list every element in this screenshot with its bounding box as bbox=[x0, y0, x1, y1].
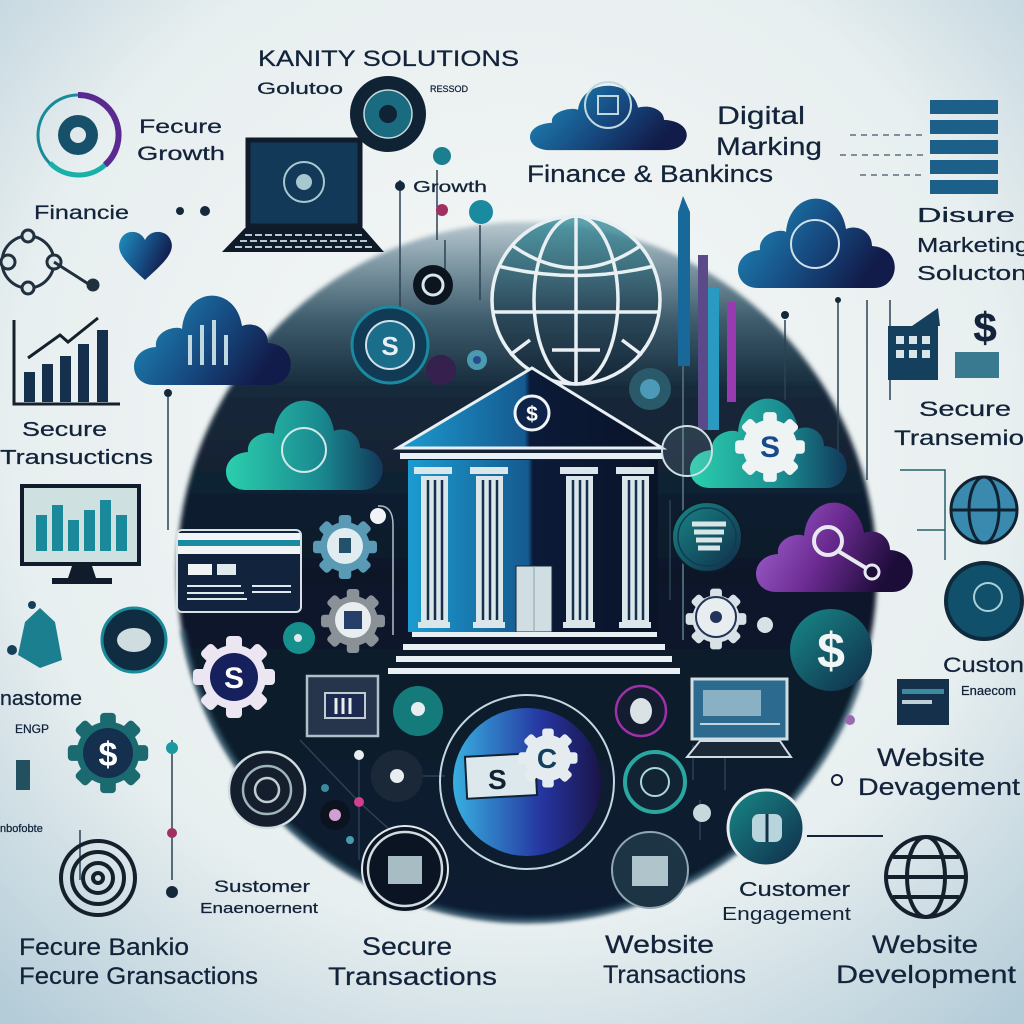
icon: search circle right bbox=[946, 563, 1022, 639]
icon: dollar coin right: $ bbox=[817, 623, 845, 679]
icon: teal cloud bbox=[226, 401, 383, 490]
icon: bottom doc coin bbox=[612, 832, 688, 908]
label: Finance and Banking: Finance & Bankincs bbox=[527, 161, 773, 188]
icon: S gear white bbox=[193, 636, 275, 718]
icon: teal circle bottom bbox=[393, 686, 443, 736]
icon: bottom circle teal ring bbox=[625, 752, 685, 812]
icon: S coin upper bbox=[352, 307, 428, 383]
icon: purple cloud bbox=[756, 503, 913, 592]
label: Digital Marketing: Digital bbox=[717, 102, 805, 130]
label: Secure Transactions bottom: Transactions bbox=[328, 963, 497, 991]
title: Golutoo bbox=[257, 79, 343, 98]
icon: S gear teal: $ bbox=[99, 736, 118, 774]
icon: gear top left bbox=[313, 515, 377, 579]
label: bottom left bbox=[19, 934, 258, 990]
label: Secure Transactions left: Transucticns bbox=[0, 447, 153, 469]
label: Customer Engagement left: Enaenoernent bbox=[200, 900, 319, 917]
label: Website Development right: Devagement bbox=[858, 774, 1020, 801]
label: Secure Transaction right bbox=[894, 398, 1024, 450]
label: Website Development bottom bbox=[836, 931, 1016, 989]
label: Disure Marketing Solutions: Disure bbox=[917, 205, 1015, 227]
icon: top cloud bbox=[530, 82, 687, 150]
label: Disure Marketing Solutions: Marketing bbox=[917, 235, 1024, 257]
heading: Secure Growth: Fecure bbox=[139, 117, 222, 138]
icon: small circle pink bbox=[320, 800, 350, 830]
label: Disure Marketing Solutions: Solucton bbox=[917, 263, 1024, 285]
icon: bank building bbox=[388, 368, 680, 674]
label: bottom left: Fecure Gransactions bbox=[19, 963, 258, 990]
icon: coin left dark bbox=[102, 608, 166, 672]
icon: S gear white: S bbox=[224, 662, 244, 695]
label: Digital Marketing bbox=[716, 102, 822, 161]
label: Financie: Financie bbox=[34, 203, 129, 224]
label: Secure Transactions bottom: Secure bbox=[362, 933, 452, 961]
icon: large disc with money: S bbox=[488, 764, 507, 795]
icon: large disc with money bbox=[440, 695, 614, 869]
icon: bank building: $ bbox=[526, 403, 538, 426]
icon: monitor bbox=[22, 486, 139, 584]
label: Customer Engagement right: Engagement bbox=[722, 904, 851, 924]
label: Customer Engagement right: Customer bbox=[739, 879, 850, 901]
icon: credit card bbox=[177, 530, 301, 612]
icon: teal puzzle bbox=[7, 601, 62, 668]
label: Website Development bottom: Website bbox=[872, 931, 978, 959]
label: Custom: Custon bbox=[943, 654, 1024, 677]
icon: dollar coin right bbox=[790, 609, 872, 691]
label: Customer Engagement left: Sustomer bbox=[214, 877, 310, 896]
heading: Secure Growth: Growth bbox=[137, 144, 225, 165]
icon: lower laptop bbox=[687, 679, 791, 757]
icon: small orbs bbox=[426, 350, 671, 410]
icon: bottom bank coin bbox=[362, 826, 448, 912]
icon: small square bbox=[16, 760, 30, 790]
icon: pink ring circle bbox=[616, 686, 666, 736]
icon: dark ball bbox=[371, 750, 423, 802]
title: RESSOD bbox=[430, 84, 469, 94]
label: bottom left: Fecure Bankio bbox=[19, 934, 189, 961]
icon: left cloud blue bbox=[134, 296, 291, 385]
icon: globe bottom right bbox=[886, 837, 966, 917]
connector lines and dots bbox=[80, 147, 945, 898]
label: Website Development right bbox=[858, 744, 1020, 801]
title bbox=[257, 46, 519, 98]
label: Secure Transactions left: Secure bbox=[22, 419, 107, 441]
icon: teal gear cloud: S bbox=[760, 431, 780, 464]
icon: gear lower bbox=[321, 589, 385, 653]
label: Website Development bottom: Development bbox=[836, 961, 1016, 989]
small label left: ENGP bbox=[15, 722, 49, 736]
label: Digital Marketing: Marking bbox=[716, 133, 822, 161]
icon: finance buildings right: $ bbox=[973, 304, 997, 351]
label: Website Transactions bottom: Website bbox=[605, 931, 714, 959]
label: Secure Transaction right: Transemio bbox=[894, 427, 1024, 450]
label: Website Transactions bottom: Transactions bbox=[603, 961, 746, 989]
icon: right cloud bbox=[738, 199, 895, 288]
icon: globe bbox=[492, 216, 660, 384]
icon: network nodes bbox=[1, 230, 98, 294]
small label right: Enaecom bbox=[961, 683, 1016, 698]
icon: S gear teal bbox=[68, 713, 148, 793]
icon: globe right bbox=[951, 477, 1017, 543]
icon: small ball bbox=[413, 265, 453, 305]
label: Disure Marketing Solutions bbox=[917, 205, 1024, 285]
icon: gear right bbox=[686, 589, 746, 649]
label: Growth: Growth bbox=[413, 179, 487, 196]
label: Secure Transactions bottom bbox=[328, 933, 497, 991]
heading: Secure Growth bbox=[137, 117, 225, 165]
icon: bottom right coin bbox=[728, 790, 804, 866]
icon: fingerprint coin bbox=[229, 752, 305, 828]
icon: target ring bbox=[38, 95, 119, 175]
icon: spiral target bbox=[61, 841, 135, 915]
icon: heart bbox=[119, 232, 172, 280]
icon: large disc with money: C bbox=[537, 743, 557, 774]
label: small left text: nbofobte bbox=[0, 823, 43, 835]
label: Website Transactions bottom bbox=[603, 931, 746, 989]
panel: central dark circle bbox=[177, 222, 877, 922]
icon: S coin upper: S bbox=[381, 331, 399, 361]
icon: small card right bbox=[897, 679, 949, 725]
icon: teal dot bbox=[283, 622, 315, 654]
label: Website Development right: Website bbox=[877, 744, 985, 772]
icon: vertical pens bbox=[678, 196, 736, 640]
label: Customer Engagement left bbox=[200, 877, 319, 917]
icon: teal chest bbox=[672, 502, 742, 572]
title: KANITY SOLUTIONS bbox=[258, 46, 519, 71]
label: Secure Transaction right: Secure bbox=[919, 398, 1011, 421]
icon: list bars top right bbox=[840, 100, 998, 194]
icon: small picture frame bbox=[307, 676, 378, 736]
icon: teal gear cloud bbox=[662, 399, 847, 488]
icon: white curved hook bbox=[378, 506, 393, 635]
label: Secure Transactions left bbox=[0, 419, 153, 469]
icon: bar chart left bbox=[14, 318, 120, 404]
icon: laptop top bbox=[222, 140, 384, 252]
icon: finance buildings right bbox=[888, 304, 999, 380]
label: Customer left: nastome bbox=[0, 688, 82, 710]
icon: top coin bbox=[350, 76, 426, 152]
label: Customer Engagement right bbox=[722, 879, 851, 924]
